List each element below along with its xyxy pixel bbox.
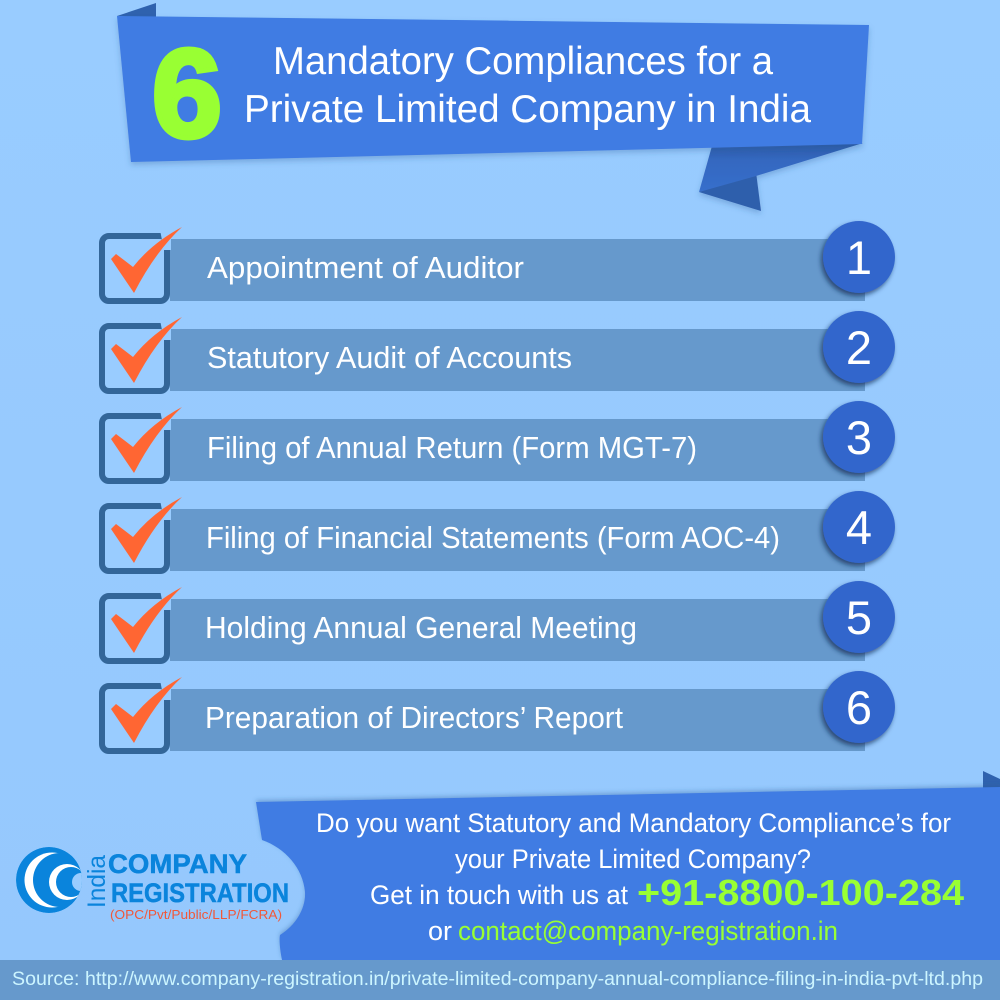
title text: Private Limited Company in India <box>244 88 811 131</box>
phone number: +91-8800-100-284 <box>637 872 964 913</box>
check mark <box>111 497 182 563</box>
banner top-left fold <box>117 3 156 18</box>
number badge: 6 <box>846 681 872 734</box>
checkbox <box>102 230 171 301</box>
number badge: 1 <box>846 231 872 284</box>
label: Statutory Audit of Accounts <box>207 340 572 375</box>
label: Preparation of Directors’ Report <box>205 700 623 735</box>
logo: REGISTRATION <box>111 878 289 908</box>
title text <box>244 40 811 131</box>
bar <box>170 599 865 661</box>
checkbox <box>102 410 171 481</box>
label: Filing of Annual Return (Form MGT-7) <box>207 430 697 465</box>
logo tagline: (OPC/Pvt/Public/LLP/FCRA) <box>110 907 282 922</box>
bar <box>170 239 865 301</box>
big number 6: 6 <box>152 25 222 164</box>
check mark <box>111 677 182 743</box>
contact text: Get in touch with us at <box>370 880 628 910</box>
item 2 <box>102 311 895 391</box>
label: Appointment of Auditor <box>207 250 524 285</box>
checkbox <box>102 500 171 571</box>
contact text: or <box>428 916 452 946</box>
title text: Mandatory Compliances for a <box>273 40 773 83</box>
contact text: your Private Limited Company? <box>455 844 811 874</box>
source bar <box>0 960 1000 1000</box>
checkbox <box>102 680 171 751</box>
banner tail <box>699 143 863 211</box>
number badge <box>823 401 895 473</box>
bar <box>170 329 865 391</box>
number badge <box>823 311 895 383</box>
item 4 <box>102 491 895 571</box>
contact banner <box>256 771 1000 960</box>
banner body <box>256 787 1000 960</box>
bar <box>170 689 865 751</box>
contact text: Do you want Statutory and Mandatory Compliance’s for <box>316 808 951 838</box>
label: Holding Annual General Meeting <box>205 610 637 645</box>
email: contact@company-registration.in <box>458 916 838 946</box>
number badge: 2 <box>846 321 872 374</box>
check mark <box>111 227 182 293</box>
logo swirl icon <box>16 847 82 913</box>
number badge <box>823 581 895 653</box>
item 6 <box>102 671 895 751</box>
number badge: 3 <box>846 411 872 464</box>
item 1 <box>102 221 895 301</box>
banner body <box>117 16 869 162</box>
check mark <box>111 407 182 473</box>
item 5 <box>102 581 895 661</box>
banner fold <box>983 771 1000 790</box>
number badge <box>823 491 895 563</box>
number badge: 4 <box>846 501 872 554</box>
item 3 <box>102 401 895 481</box>
Company Registration wordmark: COMPANY <box>108 849 247 879</box>
number badge <box>823 221 895 293</box>
bar <box>170 419 865 481</box>
check mark <box>111 317 182 383</box>
number badge <box>823 671 895 743</box>
label: Filing of Financial Statements (Form AOC-4) <box>206 520 780 555</box>
checkbox <box>102 320 171 391</box>
check mark <box>111 587 182 653</box>
source text: Source: http://www.company-registration.in/private-limited-company-annual-compliance-filing-in-india-pvt-ltd.php <box>12 969 983 990</box>
checkbox <box>102 590 171 661</box>
title banner <box>117 3 869 211</box>
number badge: 5 <box>846 591 872 644</box>
bar <box>170 509 865 571</box>
contact text <box>316 808 951 946</box>
India label: India <box>83 855 111 908</box>
logo <box>16 847 289 922</box>
